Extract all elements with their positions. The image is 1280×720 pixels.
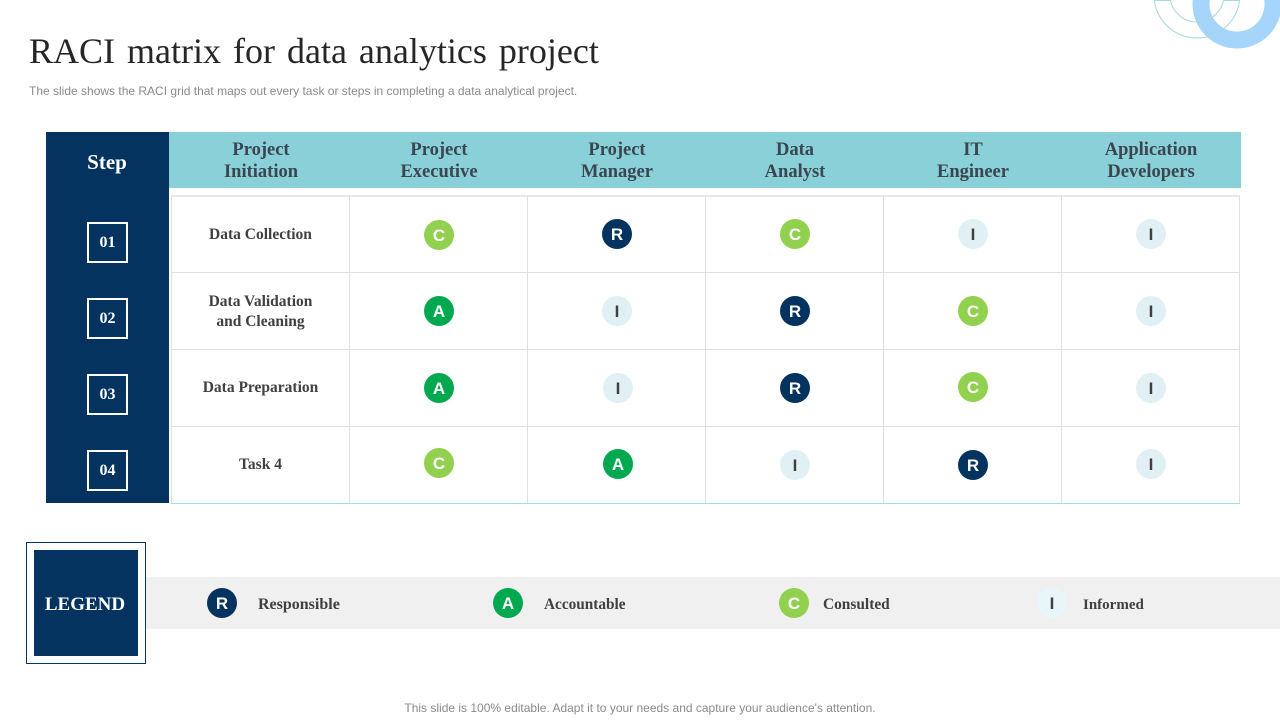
row 1 marker I (1136, 219, 1166, 249)
step number 04 (87, 450, 128, 491)
legend marker A: A (502, 594, 514, 613)
row 1 marker C: C (789, 225, 801, 244)
row 3 marker I (1136, 373, 1166, 403)
legend label Accountable: Accountable (544, 596, 626, 613)
row 4 marker I (1136, 449, 1166, 479)
legend marker C (779, 588, 809, 618)
task: Data Preparation: Data Preparation (203, 379, 318, 396)
header: IT Engineer: IT (963, 140, 983, 160)
legend marker I (1037, 588, 1067, 618)
legend marker I: I (1050, 594, 1054, 613)
row 1 marker R: R (611, 225, 623, 244)
row 4 marker R: R (967, 456, 979, 475)
row 4 marker I (780, 450, 810, 480)
table header band (169, 132, 1241, 188)
row 1 marker I: I (1149, 225, 1153, 244)
row 1 marker C (780, 219, 810, 249)
legend box outline (26, 542, 146, 664)
step number 04: 04 (100, 462, 116, 479)
legend marker R (207, 588, 237, 618)
row 2 marker I (1136, 296, 1166, 326)
row 4 marker I: I (1149, 455, 1153, 474)
step number 02 (87, 298, 128, 339)
header: Data Analyst (764, 140, 826, 182)
header: Application Developers: Developers (1107, 162, 1195, 182)
header: Project Initiation: Initiation (224, 162, 298, 182)
row 2 marker C: C (967, 302, 979, 321)
row 2 marker A (424, 296, 454, 326)
legend label Informed: Informed (1083, 597, 1144, 613)
header: Project Executive: Project (410, 140, 468, 160)
task: Data Collection: Data Collection (209, 226, 312, 243)
row 2 marker I (602, 296, 632, 326)
header: Project Initiation (224, 140, 298, 182)
task: Data Validation and Cleaning: Data Validation (209, 293, 312, 310)
row 2 marker R (780, 296, 810, 326)
row 3 marker C: C (967, 378, 979, 397)
step column panel (46, 132, 169, 503)
task: Data Validation and Cleaning (208, 293, 312, 330)
header: Project Manager: Manager (581, 162, 653, 182)
row 4 marker R (958, 450, 988, 480)
step number 02: 02 (100, 310, 116, 327)
row 1 marker C: C (433, 226, 445, 245)
header: Data Analyst: Data (776, 140, 814, 160)
step number 03 (87, 374, 128, 415)
header: Project Executive (400, 140, 478, 182)
header: Data Analyst: Analyst (765, 162, 825, 182)
header: IT Engineer (937, 140, 1009, 182)
header: Project Executive: Executive (400, 162, 478, 182)
legend label Responsible: Responsible (258, 596, 340, 613)
row 3 marker A (424, 373, 454, 403)
row 3 marker R: R (789, 379, 801, 398)
row 4 marker C: C (433, 454, 445, 473)
row 2 marker A: A (433, 302, 445, 321)
row 1 marker I (958, 219, 988, 249)
subtitle: The slide shows the RACI grid that maps out every task or steps in completing a data analytical project. (29, 84, 577, 98)
row 1 marker C (424, 220, 454, 250)
row 3 marker I: I (616, 379, 620, 398)
step number 01: 01 (100, 234, 116, 251)
row 2 marker I: I (615, 302, 619, 321)
step heading: Step (87, 150, 127, 174)
header: Project Initiation: Project (232, 140, 290, 160)
row 3 marker I (603, 373, 633, 403)
row 2 marker I: I (1149, 302, 1153, 321)
header: Application Developers (1104, 140, 1197, 182)
decorative concentric circles (1154, 0, 1280, 48)
row 2 marker C (958, 296, 988, 326)
legend label Consulted: Consulted (823, 596, 890, 613)
legend band (146, 577, 1280, 629)
legend marker R: R (216, 594, 228, 613)
step number 01 (87, 222, 128, 263)
legend marker C: C (788, 594, 800, 613)
header: Project Manager: Project (588, 140, 646, 160)
header: Project Manager (581, 140, 653, 182)
task: Task 4: Task 4 (239, 456, 282, 473)
legend marker A (493, 588, 523, 618)
header: Application Developers: Application (1105, 140, 1197, 160)
row 2 marker R: R (789, 302, 801, 321)
row 4 marker C (424, 448, 454, 478)
row 4 marker I: I (793, 456, 797, 475)
row 4 marker A: A (612, 455, 624, 474)
row 1 marker I: I (971, 225, 975, 244)
footer note: This slide is 100% editable. Adapt it to your needs and capture your audience's attention. (404, 701, 876, 715)
row 4 marker A (603, 449, 633, 479)
row 3 marker R (780, 373, 810, 403)
title: RACI matrix for data analytics project (29, 31, 599, 71)
step number 03: 03 (100, 386, 116, 403)
legend heading: LEGEND (45, 594, 125, 615)
row 3 marker I: I (1149, 379, 1153, 398)
row 3 marker C (958, 372, 988, 402)
header: IT Engineer: Engineer (937, 162, 1009, 182)
task: Data Validation and Cleaning: and Cleaning (216, 313, 305, 330)
legend heading (34, 550, 138, 656)
row 3 marker A: A (433, 379, 445, 398)
row 1 marker R (602, 219, 632, 249)
